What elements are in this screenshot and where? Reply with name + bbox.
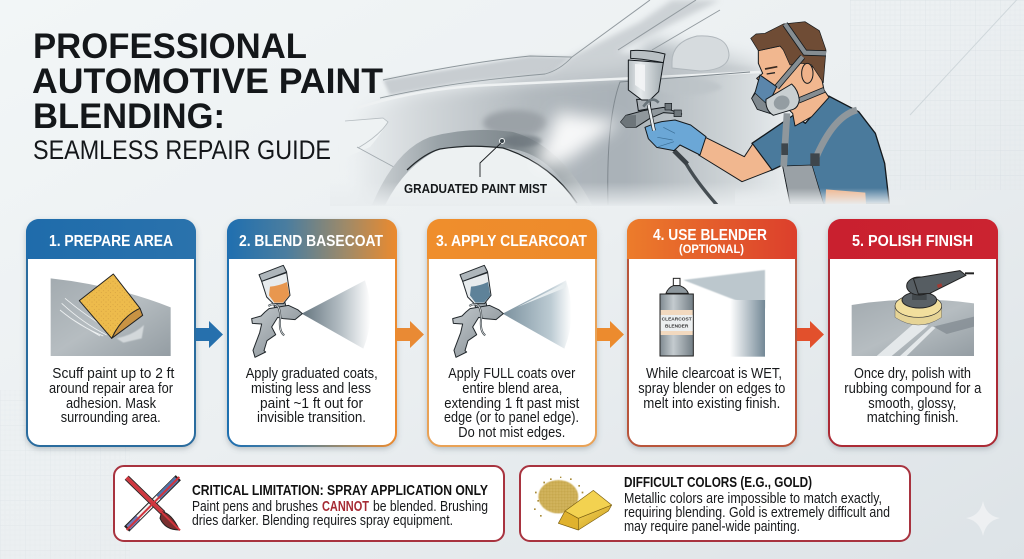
arch opening (385, 146, 577, 206)
text 5: Once dry, polish with (854, 366, 971, 382)
step card 3: apply clearcoat: 3. APPLY CLEARCOAT (436, 233, 587, 250)
title: SEAMLESS REPAIR GUIDE (33, 135, 331, 165)
text: dries darker. Blending requires spray equipment. (192, 513, 453, 529)
mirror (672, 36, 729, 71)
base fade (735, 188, 905, 205)
step card 5: polish finish: 5. POLISH FINISH (852, 233, 973, 250)
arrow 3 (597, 321, 624, 348)
fender band (372, 130, 592, 205)
text 2: misting less and less (251, 381, 371, 397)
overalls (783, 165, 824, 204)
title: AUTOMOTIVE PAINT (32, 62, 383, 101)
header 5 (828, 219, 998, 259)
text 1: adhesion. Mask (66, 396, 157, 412)
text 5: smooth, glossy, (868, 396, 956, 412)
forearm (699, 137, 772, 182)
text 5: matching finish. (867, 410, 959, 426)
icon: crossed out pen and brush (127, 477, 180, 530)
text (192, 482, 488, 529)
text 4: spray blender on edges to (638, 381, 785, 397)
text 1 (49, 366, 174, 426)
icon: clearcoat blender can (660, 270, 765, 357)
icon: clearcoat blender can: CLEARCOST (662, 317, 692, 322)
hood (383, 56, 570, 95)
arrow 2 (397, 321, 424, 348)
spray gun and glove (621, 50, 706, 155)
callout: graduated paint mist (404, 138, 547, 196)
text (624, 474, 890, 535)
icon: sparkle (966, 501, 1000, 536)
text: CANNOT (322, 499, 369, 515)
icon: spray gun with clearcoat (453, 265, 571, 357)
icon: spray gun with basecoat (252, 265, 370, 357)
step card 4: use blender: 4. USE BLENDER (653, 227, 767, 244)
spray mist (536, 112, 620, 168)
arrow 1 (196, 321, 223, 348)
text 5 (844, 366, 982, 426)
step card 1: prepare area: 1. PREPARE AREA (49, 233, 173, 250)
header 1 (26, 219, 196, 259)
text: may require panel-wide painting. (624, 519, 800, 535)
text 3 (444, 366, 579, 441)
icon: rotary polisher (852, 271, 974, 356)
title: BLENDING: (33, 97, 225, 136)
text: DIFFICULT COLORS (E.G., GOLD) (624, 474, 812, 491)
dark blend patch (483, 110, 547, 136)
air hose (674, 151, 718, 207)
header 2 (227, 219, 397, 259)
icon: gold bar and pile (534, 477, 612, 530)
text 3: extending 1 ft past mist (444, 396, 579, 412)
text 4 (638, 366, 785, 412)
text 4: While clearcoat is WET, (646, 366, 782, 382)
text 2: paint ~1 ft out for (260, 396, 363, 412)
text 3: entire blend area, (462, 381, 562, 397)
worker torso (752, 96, 889, 204)
door line (608, 72, 750, 205)
text 3: Apply FULL coats over (448, 366, 575, 382)
step card 1: prepare area (26, 219, 196, 446)
text 1: surrounding area. (61, 410, 161, 426)
text 2 (246, 366, 378, 426)
fade (372, 183, 771, 206)
text 3: Do not mist edges. (458, 425, 565, 441)
head (751, 22, 829, 126)
fender peak (368, 118, 388, 148)
title (32, 27, 383, 165)
illustration: car fender (345, 0, 778, 205)
text 2: invisible transition. (257, 410, 366, 426)
step card 5: polish finish (828, 219, 998, 446)
text: CRITICAL LIMITATION: SPRAY APPLICATION ONLY (192, 482, 488, 499)
step card 4: use blender: (OPTIONAL) (679, 242, 744, 256)
header 3 (427, 219, 597, 259)
text 3: edge (or to panel edge). (444, 410, 579, 426)
callout panel: critical limitation (114, 466, 504, 541)
text: requiring blending. Gold is extremely difficult and (624, 505, 890, 521)
arrow 4 (797, 321, 824, 348)
step card 3: apply clearcoat (427, 219, 597, 446)
text 1: Scuff paint up to 2 ft (52, 366, 174, 382)
icon: clearcoat blender can: BLENDER (665, 323, 689, 328)
text: Metallic colors are impossible to match exactly, (624, 491, 882, 507)
text 4: melt into existing finish. (643, 396, 780, 412)
title: PROFESSIONAL (33, 27, 307, 66)
step card 2: blend basecoat (227, 219, 397, 446)
text: be blended. Brushing (373, 499, 488, 515)
icon: sandpaper on panel (51, 274, 171, 356)
illustration: painter with spray gun (621, 22, 905, 207)
text 5: rubbing compound for a (844, 381, 982, 397)
callout panel: difficult colors (520, 466, 910, 541)
header 4 (627, 219, 797, 259)
text 2: Apply graduated coats, (246, 366, 378, 382)
step card 2: blend basecoat: 2. BLEND BASECOAT (239, 233, 383, 250)
text: Paint pens and brushes (192, 499, 318, 515)
step card 4: use blender (627, 219, 797, 446)
callout: graduated paint mist: GRADUATED PAINT MIST (404, 181, 547, 196)
text 1: around repair area for (49, 381, 173, 397)
